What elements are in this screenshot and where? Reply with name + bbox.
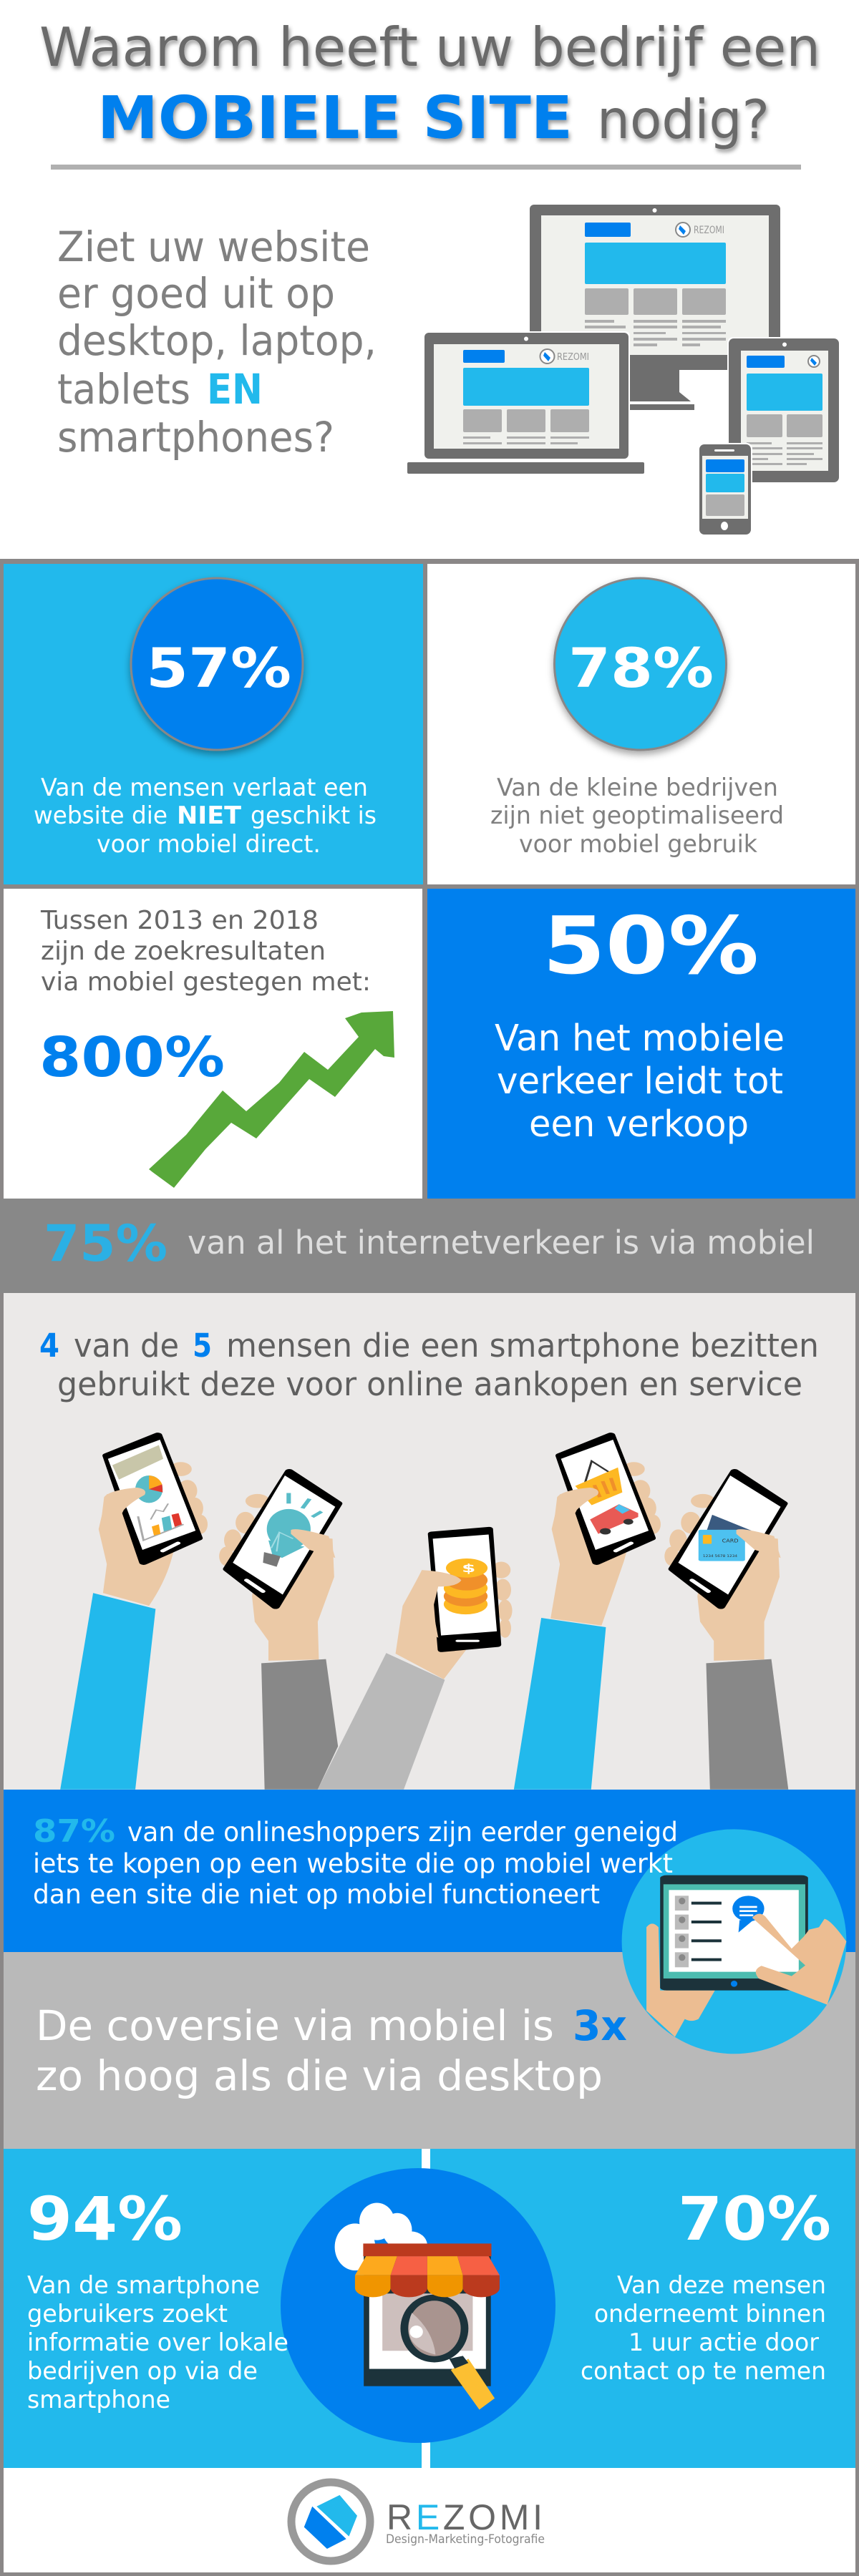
text: conversie: De coversie via mobiel is: [36, 2001, 554, 2050]
text: 87% band: 87%: [33, 1813, 115, 1850]
band: 75%: van al het internetverkeer is via mobiel: [188, 1224, 815, 1262]
stat: 94%: informatie over lokale: [27, 2328, 288, 2357]
text: 87% band: dan een site die niet op mobiel functioneert: [33, 1879, 600, 1910]
text: 78% description: [490, 774, 784, 859]
hand 5: credit card phone: [664, 1472, 788, 1790]
circle: 78%: [554, 578, 726, 750]
stat: 70%: 1 uur actie door: [629, 2328, 819, 2357]
arrow: green growth: [149, 1011, 394, 1188]
icon: responsive devices: [407, 205, 840, 536]
icon: desktop monitor: [530, 205, 780, 410]
footer: Rezomi logo: Design-Marketing-Fotografie: [386, 2532, 545, 2547]
heading: 4 van de 5: mensen die een smartphone bezitten: [226, 1327, 819, 1365]
text: 78% description: zijn niet geoptimaliseerd: [490, 801, 784, 830]
text: 57% description: [34, 774, 377, 859]
stat: 94%: smartphone: [27, 2386, 170, 2414]
text: 50% description: een verkoop: [529, 1103, 749, 1146]
intro question text: Ziet uw website: [57, 223, 370, 271]
band: 75%: 75%: [44, 1214, 168, 1273]
circle: 57%: 57%: [146, 636, 291, 700]
band: 75%: [0, 1199, 859, 1293]
title: nodig?: [597, 88, 770, 151]
hand 1: chart phone: [60, 1435, 208, 1790]
text: 87% band: iets te kopen op een website die op mobiel werkt: [33, 1848, 673, 1879]
footer: Rezomi logo: REZOMI: [387, 2497, 543, 2537]
stat: 94%: gebruikers zoekt: [27, 2300, 228, 2328]
text: 57% description: NIET: [177, 801, 242, 830]
intro question text: desktop, laptop,: [57, 316, 377, 365]
text: 87% band: [33, 1813, 678, 1910]
intro question text: tablets: [57, 365, 190, 414]
text: growth description: zijn de zoekresultaten: [41, 937, 326, 966]
text: 57% description: geschikt is: [251, 801, 377, 830]
text: 57% description: website die: [34, 801, 168, 830]
circle: 57%: [131, 578, 303, 750]
panel: 57%: [4, 564, 423, 884]
text: conversie: 3x: [573, 2001, 627, 2050]
stat: 70%: Van deze mensen: [617, 2271, 826, 2300]
stat: 800%: 800%: [39, 1026, 225, 1090]
stat: 94%: 94%: [27, 2184, 183, 2254]
heading: 4 van de 5: 5: [193, 1327, 212, 1365]
hand 5: credit card phone: 1234 5678 1234: [703, 1554, 737, 1558]
hand 4: shopping phone: [514, 1435, 661, 1790]
stat: 94%: Van de smartphone: [27, 2271, 260, 2300]
heading: 4 van de 5: 4: [39, 1327, 59, 1365]
icon: smartphone: [698, 443, 752, 536]
text: 57% description: Van de mensen verlaat een: [41, 774, 368, 802]
text: conversie: zo hoog als die via desktop: [36, 2051, 603, 2100]
icon: laptop: [407, 331, 644, 474]
illustration: raised hands with phones: [60, 1435, 788, 1790]
heading: 4 van de 5: gebruikt deze voor online aankopen en service: [57, 1365, 802, 1403]
hand 5: credit card phone: CARD: [722, 1538, 739, 1544]
panel: 800% growth: [4, 889, 422, 1199]
icon: desktop monitor: REZOMI: [694, 225, 724, 236]
text: 78% description: voor mobiel gebruik: [519, 830, 757, 859]
hand 3: coins phone: $: [462, 1562, 475, 1575]
icon: Rezomi mark: [291, 2482, 370, 2561]
stat: 94%: bedrijven op via de: [27, 2357, 258, 2386]
text: growth description: Tussen 2013 en 2018: [40, 906, 319, 935]
stat: 70%: [581, 2184, 831, 2386]
panel: smartphone users: [4, 1293, 855, 1790]
text: conversie: [36, 2001, 627, 2100]
title: [39, 16, 820, 152]
circle: 78%: 78%: [568, 636, 714, 700]
icon: tablet in hands: [622, 1829, 846, 2054]
panel: 78%: [427, 564, 855, 884]
heading: 4 van de 5: van de: [74, 1327, 179, 1365]
text: 50% description: Van het mobiele: [495, 1018, 785, 1060]
band backgrounds: blue and gray: [4, 1790, 855, 2149]
intro question text: EN: [207, 365, 263, 414]
stat: 94%: [27, 2184, 288, 2414]
icon: tablet: [727, 337, 840, 484]
text: 50% description: verkeer leidt tot: [497, 1060, 783, 1103]
footer: Rezomi logo: [4, 2468, 855, 2572]
title: Waarom heeft uw bedrijf een: [39, 16, 820, 79]
text: 87% band: van de onlineshoppers zijn eerder geneigd: [127, 1817, 678, 1848]
panel: local search: [4, 2149, 855, 2468]
icon: local store with magnifier: [281, 2168, 555, 2443]
text: 78% description: Van de kleine bedrijven: [497, 774, 778, 802]
panel: 50%: [427, 889, 855, 1199]
stat: 70%: contact op te nemen: [581, 2357, 826, 2386]
icon: laptop: REZOMI: [557, 352, 589, 363]
stat: 70%: 70%: [678, 2184, 831, 2254]
title: MOBIELE SITE: [97, 84, 573, 152]
hand 3: coins phone: [318, 1529, 513, 1790]
intro question text: [57, 223, 377, 462]
stat: 70%: onderneemt binnen: [594, 2300, 826, 2328]
intro question text: er goed uit op: [57, 269, 335, 318]
heading: 4 van de 5: [39, 1327, 819, 1403]
text: 50% description: [495, 1018, 785, 1146]
text: growth description: via mobiel gestegen met:: [41, 967, 371, 997]
intro question text: smartphones?: [57, 413, 334, 462]
text: 57% description: voor mobiel direct.: [97, 830, 321, 859]
panel: 50%: 50%: [543, 900, 759, 992]
text: growth description: [40, 906, 371, 997]
hand 2: light bulb phone: [219, 1472, 338, 1790]
